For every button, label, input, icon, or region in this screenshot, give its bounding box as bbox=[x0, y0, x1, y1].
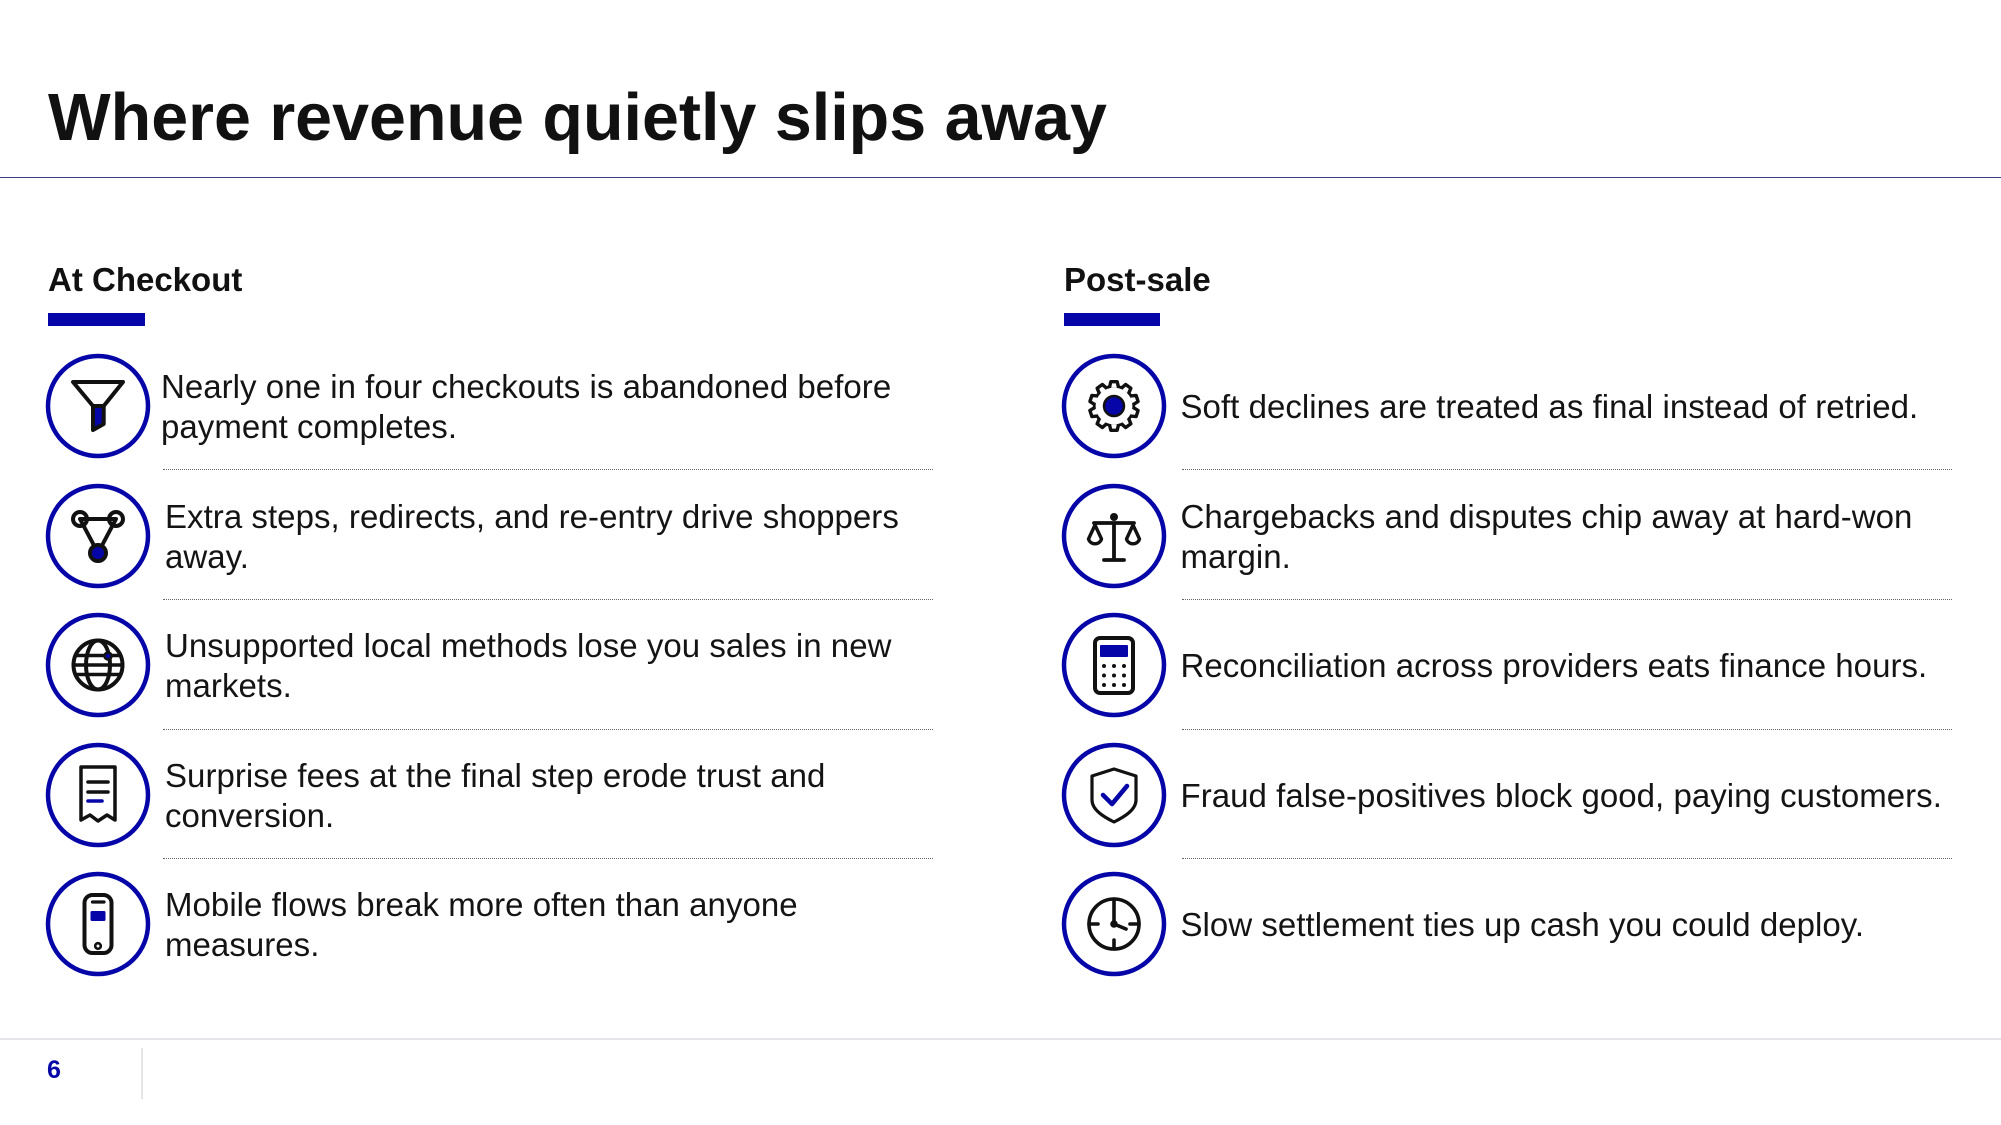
icon: network bbox=[46, 484, 150, 588]
text: chargebacks bbox=[1180, 498, 1912, 575]
icon: gear bbox=[1062, 354, 1166, 458]
icon: globe bbox=[46, 612, 150, 718]
icon: shield bbox=[1062, 742, 1166, 848]
icon: calculator bbox=[1062, 612, 1166, 718]
text: reconciliation: Reconciliation across providers eats finance hours. bbox=[1180, 647, 1927, 684]
icon: clock bbox=[1062, 872, 1166, 976]
text: soft declines: Soft declines are treated as final instead of retried. bbox=[1180, 388, 1918, 425]
title rule bbox=[0, 177, 2001, 178]
text: local methods: Unsupported local methods lose you sales in new bbox=[165, 627, 891, 664]
icon: phone bbox=[46, 872, 150, 976]
text: abandoned checkouts: payment completes. bbox=[161, 408, 457, 445]
text: slow settlement: Slow settlement ties up cash you could deploy. bbox=[1180, 906, 1864, 943]
text: extra steps bbox=[165, 498, 899, 575]
heading: at checkout: At Checkout bbox=[48, 261, 242, 298]
text: abandoned checkouts: Nearly one in four checkouts is abandoned before bbox=[161, 368, 891, 405]
text: mobile flows: Mobile flows break more often than anyone bbox=[165, 886, 798, 923]
heading: post-sale: Post-sale bbox=[1064, 261, 1211, 298]
panel: at checkout bbox=[46, 261, 933, 976]
page number: 6 bbox=[47, 1056, 61, 1084]
panel: post-sale bbox=[1062, 261, 1952, 976]
text: chargebacks: Chargebacks and disputes chip away at hard-won bbox=[1180, 498, 1912, 535]
text: surprise fees bbox=[165, 757, 825, 834]
icon: scales bbox=[1062, 484, 1166, 588]
heading accent bar bbox=[48, 313, 145, 326]
text: mobile flows bbox=[165, 886, 798, 963]
icon: receipt bbox=[46, 742, 150, 848]
text: extra steps: Extra steps, redirects, and re-entry drive shoppers bbox=[165, 498, 899, 535]
text: local methods bbox=[165, 627, 892, 704]
text: fraud false-positives: Fraud false-positives block good, paying customers. bbox=[1180, 777, 1942, 814]
icon: funnel bbox=[46, 354, 150, 458]
text: chargebacks: margin. bbox=[1180, 538, 1291, 575]
text: surprise fees: Surprise fees at the final step erode trust and bbox=[165, 757, 825, 794]
text: extra steps: away. bbox=[165, 538, 249, 575]
text: surprise fees: conversion. bbox=[165, 797, 334, 834]
text: mobile flows: measures. bbox=[165, 926, 319, 963]
text: local methods: markets. bbox=[165, 667, 292, 704]
text: abandoned checkouts bbox=[161, 368, 891, 445]
heading accent bar bbox=[1064, 313, 1160, 326]
title: Where revenue quietly slips away bbox=[48, 80, 1107, 154]
